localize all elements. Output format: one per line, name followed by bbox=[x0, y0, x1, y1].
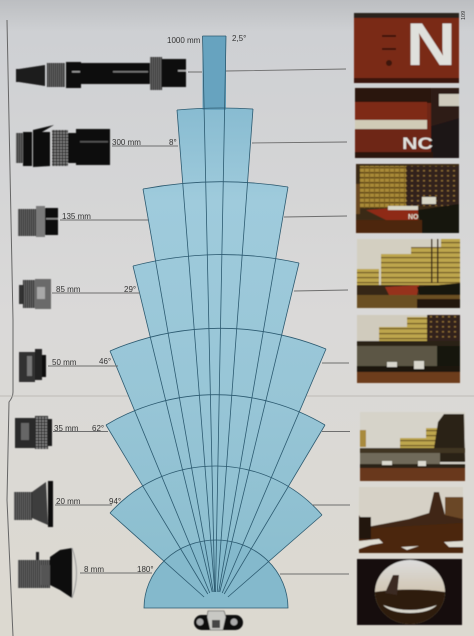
label: 35 mm: 35 mm bbox=[54, 424, 79, 433]
icon: 1000 mm lens bbox=[16, 57, 186, 90]
label: 50 mm: 50 mm bbox=[52, 358, 77, 367]
icon: 35 mm lens bbox=[15, 416, 52, 449]
icon: 135 mm lens bbox=[18, 206, 58, 237]
photo: 8 mm fisheye bbox=[356, 558, 463, 626]
label: 85 mm: 85 mm bbox=[56, 285, 81, 294]
leader lines bbox=[48, 69, 350, 574]
icon: 50 mm lens bbox=[19, 349, 46, 382]
photo: 135 mm bbox=[355, 163, 460, 234]
label: 46 degrees: 46° bbox=[99, 357, 111, 366]
label: 2,5 degrees: 2,5° bbox=[232, 34, 246, 43]
label: 8 degrees: 8° bbox=[169, 138, 177, 147]
label: 94 degrees: 94° bbox=[109, 497, 121, 506]
lens labels bbox=[52, 34, 246, 574]
sector fills bbox=[106, 36, 326, 608]
label: 300 mm: 300 mm bbox=[112, 138, 141, 147]
label: 29 degrees: 29° bbox=[124, 285, 136, 294]
label: 20 mm: 20 mm bbox=[56, 497, 81, 506]
photo: 1000 mm: N bbox=[406, 11, 456, 78]
photo: 85 mm bbox=[356, 238, 461, 309]
photo: 1000 mm bbox=[353, 11, 460, 84]
sector outlines bbox=[106, 36, 326, 608]
icon: 300 mm lens bbox=[16, 125, 110, 167]
label: 62 degrees: 62° bbox=[92, 424, 104, 433]
label: 1000 mm: 1000 mm bbox=[167, 36, 201, 45]
icon: 8 mm lens bbox=[18, 548, 76, 598]
photo: 50 mm bbox=[356, 314, 461, 384]
icon: 85 mm lens bbox=[19, 279, 51, 309]
label: 135 mm: 135 mm bbox=[62, 212, 91, 221]
photo: 300 mm bbox=[354, 87, 460, 159]
photo: 300 mm: NC bbox=[402, 134, 433, 153]
label: 180 degrees: 180° bbox=[137, 565, 154, 574]
chart: angle of view fan bbox=[106, 36, 326, 608]
lens icons bbox=[14, 57, 243, 630]
photo: 135 mm: NO bbox=[408, 214, 419, 221]
page number: 109 bbox=[461, 11, 467, 20]
photo strip bbox=[354, 11, 465, 625]
label: 8 mm: 8 mm bbox=[84, 565, 104, 574]
photo: 20 mm bbox=[358, 487, 464, 554]
photo: 35 mm bbox=[359, 412, 466, 482]
icon: camera body bbox=[194, 611, 243, 630]
icon: 20 mm lens bbox=[14, 481, 53, 527]
